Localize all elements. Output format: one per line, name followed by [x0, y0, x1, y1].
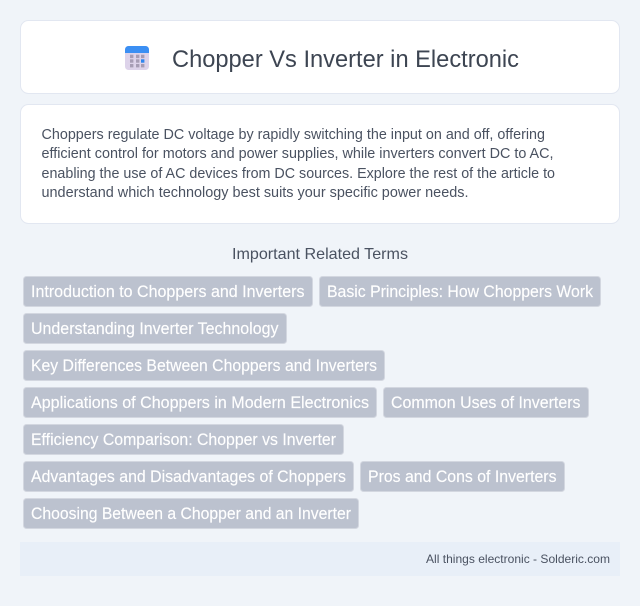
text block: description: enabling the use of AC devices from DC sources. Explore the rest of the article to	[42, 166, 555, 182]
text block: description: Choppers regulate DC voltage by rapidly switching the input on and off, offering	[42, 127, 545, 143]
heading: important related terms: Important Related Terms	[232, 246, 408, 263]
tag: efficiency	[24, 424, 344, 454]
tag: pros and cons	[360, 462, 564, 492]
tag: inverter technology	[24, 314, 286, 344]
footer	[20, 542, 620, 576]
text block: description: efficient control for motors and power supplies, while inverters convert DC to AC,	[42, 146, 554, 162]
tag: choosing: Choosing Between a Chopper and an Inverter	[31, 505, 351, 523]
tag: applications	[24, 388, 376, 418]
tag: advantages	[24, 462, 354, 492]
tag: common uses	[384, 388, 588, 418]
tag: pros and cons: Pros and Cons of Inverters	[368, 468, 556, 486]
panel: header	[20, 20, 620, 94]
tag: introduction	[24, 276, 312, 306]
tag: common uses: Common Uses of Inverters	[391, 394, 580, 412]
text block: description: understand which technology best suits your specific power needs.	[42, 185, 468, 201]
tag: introduction: Introduction to Choppers and Inverters	[31, 283, 304, 301]
title: Chopper Vs Inverter in Electronic	[172, 46, 519, 73]
panel: description	[20, 104, 620, 224]
tag: efficiency: Efficiency Comparison: Chopper vs Inverter	[31, 431, 336, 449]
tag list	[24, 276, 600, 528]
icon: calendar grid	[125, 46, 149, 70]
tag: basic principles: Basic Principles: How Choppers Work	[327, 283, 594, 301]
tag: advantages: Advantages and Disadvantages of Choppers	[31, 468, 346, 486]
tag: choosing	[24, 498, 358, 528]
footer credit: All things electronic - Solderic.com	[426, 552, 610, 566]
tag: basic principles	[320, 276, 600, 306]
tag: inverter technology: Understanding Inverter Technology	[31, 320, 279, 338]
tag: key differences	[24, 350, 384, 380]
tag: applications: Applications of Choppers in Modern Electronics	[31, 394, 369, 412]
tag: key differences: Key Differences Between Choppers and Inverters	[31, 357, 377, 375]
text block: description	[42, 127, 555, 201]
